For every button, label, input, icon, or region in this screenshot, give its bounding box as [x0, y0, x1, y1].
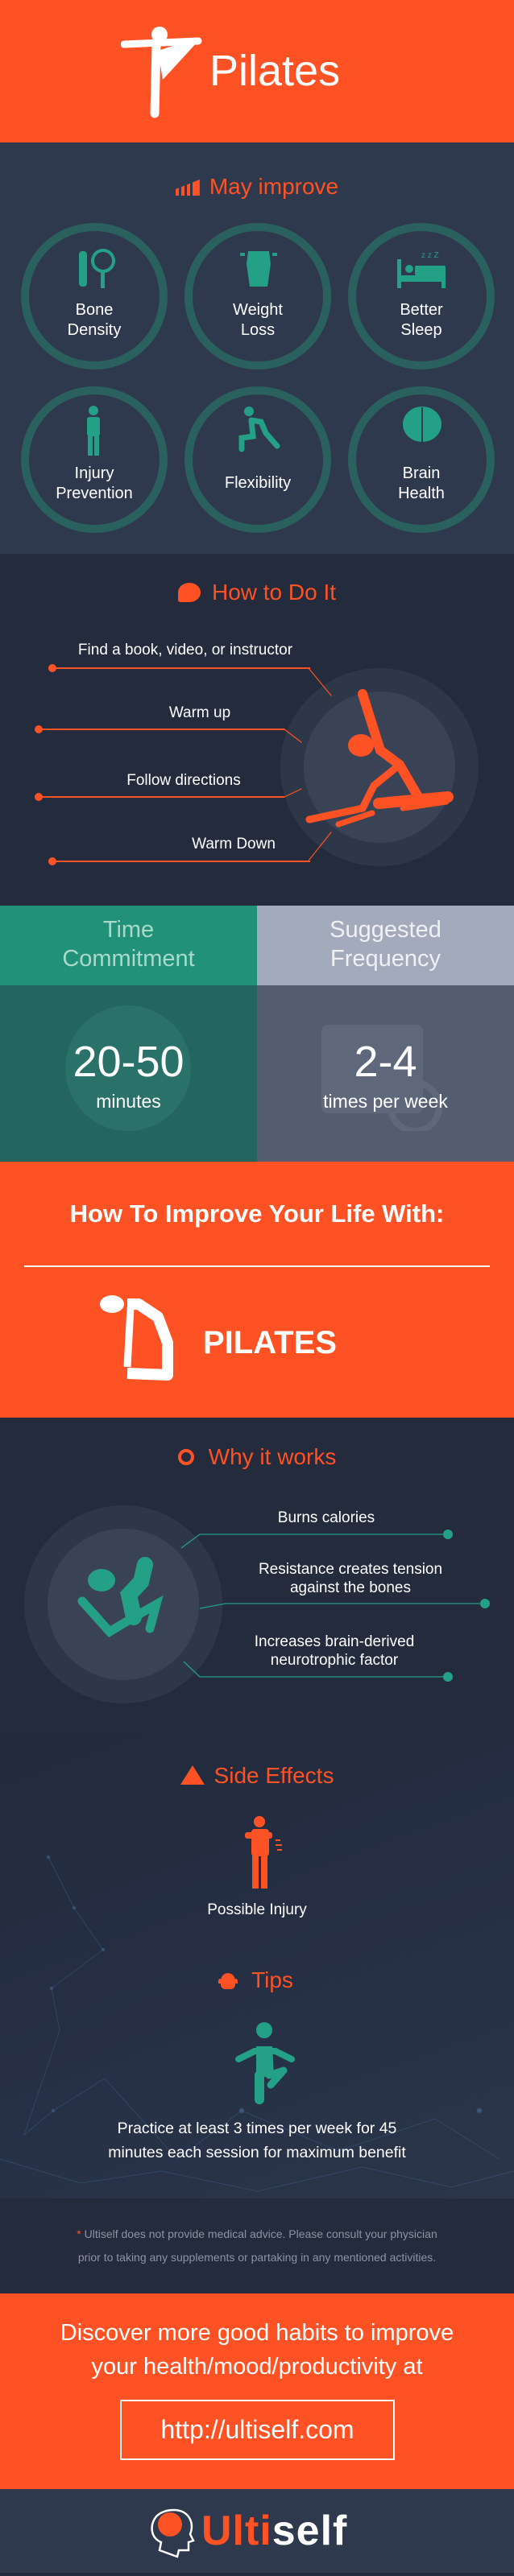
panel: suggested frequency: times per week	[323, 1091, 448, 1112]
step: find a book	[48, 642, 310, 672]
circle: injury prevention	[21, 386, 168, 533]
panel: time commitment: minutes	[96, 1091, 161, 1112]
banner title: How To Improve Your Life With:	[70, 1199, 444, 1228]
heading: why it works: Why it works	[209, 1444, 336, 1469]
label: possible injury: Possible Injury	[207, 1901, 307, 1918]
step: warm down: Warm Down	[192, 836, 276, 852]
step: warm up	[35, 704, 284, 733]
step: follow directions: Follow directions	[126, 772, 241, 789]
header: time commitment: Time	[103, 917, 154, 943]
banner: how to improve	[0, 1162, 514, 1418]
reason: resistance	[259, 1561, 442, 1596]
label: brain health: Health	[398, 485, 445, 502]
disclaimer	[0, 2198, 514, 2293]
header: time commitment: Commitment	[62, 946, 195, 972]
icon: calendar background	[321, 1025, 442, 1131]
icon: waist	[240, 251, 277, 287]
step: warm up: Warm up	[169, 704, 230, 721]
heading: tips: Tips	[251, 1967, 293, 1992]
icon: bone	[79, 249, 115, 288]
heading: may improve: May improve	[209, 174, 338, 199]
label: injury prevention	[56, 464, 133, 502]
icon: injured person	[245, 1816, 282, 1889]
heading: side effects: Side Effects	[214, 1763, 334, 1788]
disclaimer: prior to taking any supplements or partaking in any mentioned activities.	[78, 2251, 436, 2264]
panel: time commitment	[0, 906, 257, 1162]
header: time commitment	[0, 906, 257, 985]
url box	[120, 2400, 395, 2460]
icon: balancing figure	[235, 2022, 295, 2104]
label: better sleep: Better	[400, 301, 443, 319]
label: weight loss: Weight	[233, 301, 283, 319]
reason: bdnf	[255, 1633, 414, 1669]
label: better sleep	[400, 301, 443, 339]
icon: bed: z z Z	[421, 251, 439, 260]
circle: weight loss	[184, 223, 331, 369]
label: better sleep: Sleep	[400, 321, 442, 339]
panel: may improve	[0, 142, 514, 554]
url box: http://ultiself.com	[160, 2415, 354, 2444]
circle: better sleep	[348, 223, 495, 369]
disclaimer: * Ultiself does not provide medical advice. Please consult your physician	[77, 2227, 437, 2240]
reason: burns calories: Burns calories	[278, 1509, 375, 1526]
label: weight loss	[233, 301, 283, 339]
call to action	[0, 2293, 514, 2489]
header: suggested frequency: Suggested	[330, 917, 441, 943]
panel: side effects and tips	[0, 1732, 514, 2198]
circle: brain health	[348, 386, 495, 533]
tip text	[108, 2120, 406, 2161]
circle: bone density	[21, 223, 168, 369]
icon: ultiself logo head	[151, 2508, 195, 2558]
header: suggested frequency: Frequency	[330, 946, 441, 972]
icon: bending figure	[100, 1295, 173, 1381]
illustration: jumping figure	[24, 1505, 490, 1703]
cta text: Discover more good habits to improve	[60, 2320, 454, 2346]
panel: why it works	[0, 1418, 514, 1732]
label: bone density: Density	[68, 321, 121, 339]
logo text: Ultiself	[201, 2508, 347, 2554]
tip text: minutes each session for maximum benefit	[108, 2144, 406, 2161]
stat: 20-50 minutes: 20-50	[73, 1038, 184, 1086]
label: brain health	[398, 464, 445, 502]
icon: injury person	[87, 406, 100, 456]
reason: bdnf: neurotrophic factor	[271, 1652, 398, 1669]
step: warm down	[48, 836, 310, 865]
heading: tips	[218, 1967, 293, 1992]
icon: brain	[403, 407, 441, 442]
reason: resistance: Resistance creates tension	[259, 1561, 442, 1578]
step: find a book: Find a book, video, or instructor	[78, 642, 292, 658]
icon: clock background	[65, 1005, 191, 1131]
banner subtitle: pilates: PILATES	[203, 1325, 337, 1360]
reason: resistance: against the bones	[290, 1579, 411, 1596]
label: flexibility: Flexibility	[225, 474, 291, 492]
label: injury prevention: Prevention	[56, 485, 133, 502]
tip text: Practice at least 3 times per week for 45	[118, 2120, 396, 2137]
header	[0, 0, 514, 142]
cta text: your health/mood/productivity at	[91, 2354, 423, 2380]
icon: pilates figure	[121, 27, 201, 118]
header: suggested frequency	[257, 906, 514, 985]
title: Pilates	[209, 47, 340, 95]
icon: lunge	[238, 407, 280, 452]
icon: bed	[397, 251, 446, 288]
label: brain health: Brain	[403, 464, 440, 482]
stat: 2-4 times per week: 2-4	[354, 1038, 417, 1086]
illustration: stretch figure in circle	[280, 668, 479, 866]
circle: flexibility	[184, 386, 331, 533]
step: follow directions	[35, 772, 284, 801]
panel: how to do it	[0, 554, 514, 906]
label: bone density: Bone	[76, 301, 113, 319]
cta text	[60, 2320, 454, 2380]
panel: suggested frequency	[257, 906, 514, 1162]
footer	[0, 2489, 514, 2576]
label: weight loss: Loss	[241, 321, 275, 339]
heading: how to do it: How to Do It	[212, 580, 336, 605]
reason: bdnf: Increases brain-derived	[255, 1633, 414, 1650]
label: bone density	[68, 301, 121, 339]
label: injury prevention: Injury	[75, 464, 114, 482]
